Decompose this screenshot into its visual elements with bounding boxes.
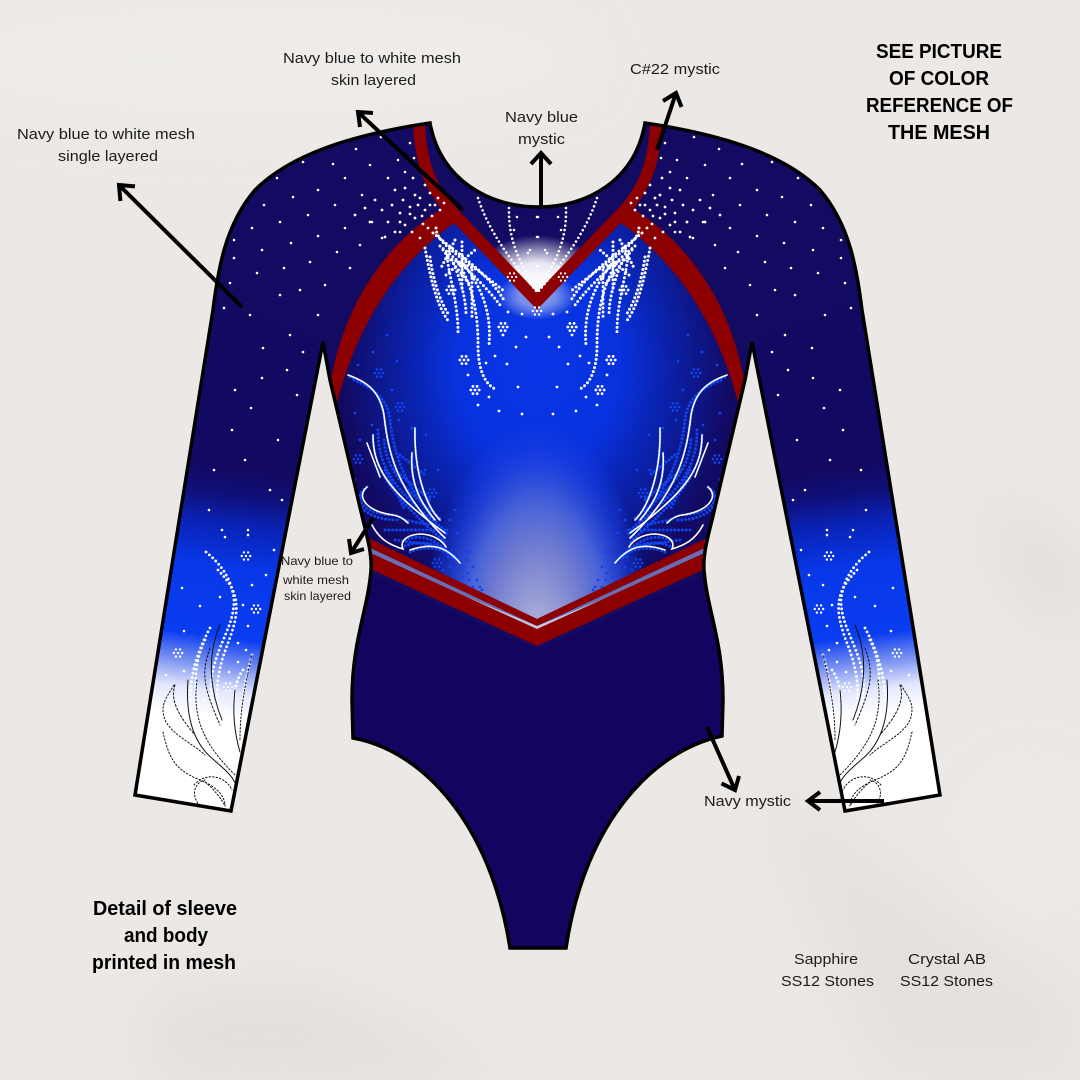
- label: skin layered mesh: skin layered: [331, 72, 416, 89]
- arrow: navy mystic from body: [707, 727, 739, 790]
- legend: sapphire stones: [781, 951, 874, 990]
- heading: detail of sleeve and body: printed in mesh: [92, 952, 236, 974]
- label: waist skin layered mesh: Navy blue to: [281, 554, 353, 568]
- red and silver waist chevrons: [366, 537, 709, 646]
- garment base fabric: [120, 110, 960, 960]
- neckline centre gem: [533, 307, 541, 315]
- heading: detail of sleeve and body: [92, 898, 237, 974]
- label: navy blue mystic: mystic: [518, 131, 566, 148]
- arrow: navy blue mystic: [531, 153, 551, 206]
- heading: see picture of color reference: REFERENCE OF: [866, 95, 1013, 117]
- arrow: C#22 mystic: [657, 93, 682, 150]
- leotard garment: [120, 110, 960, 960]
- label: navy mystic: Navy mystic: [704, 793, 792, 810]
- legend: crystal AB stones: SS12 Stones: [900, 973, 993, 990]
- arrow: waist skin layered: [349, 518, 373, 553]
- legend: sapphire stones: Sapphire: [794, 951, 858, 968]
- arrows: [119, 93, 884, 810]
- arrow: single layered mesh: [119, 185, 242, 307]
- right sleeve gradient: [783, 473, 938, 809]
- label: navy blue mystic: Navy blue: [505, 109, 578, 126]
- label: waist skin layered mesh: [281, 554, 353, 603]
- right rhinestone decoration: [538, 137, 912, 806]
- yoke glow: [494, 236, 580, 292]
- garment outline: [135, 123, 940, 948]
- heading: detail of sleeve and body: Detail of sleeve: [93, 898, 237, 920]
- label: skin layered mesh: [283, 50, 461, 89]
- heading: detail of sleeve and body: and body: [124, 925, 209, 947]
- label: skin layered mesh: Navy blue to white mesh: [283, 50, 461, 67]
- left sleeve gradient: [137, 473, 292, 809]
- heading: see picture of color reference: THE MESH: [888, 122, 990, 144]
- label: waist skin layered mesh: skin layered: [284, 589, 351, 603]
- torso gradient panel: [350, 223, 725, 619]
- lower body panel: [340, 560, 735, 950]
- label: navy blue mystic: [505, 109, 578, 148]
- heading: see picture of color reference: OF COLOR: [889, 68, 990, 90]
- label: waist skin layered mesh: white mesh: [282, 573, 349, 587]
- label: single layered mesh: single layered: [58, 148, 158, 165]
- legend: sapphire stones: SS12 Stones: [781, 973, 874, 990]
- arrow: skin layered mesh: [358, 112, 463, 210]
- legend: crystal AB stones: Crystal AB: [908, 951, 986, 968]
- red neckline V band: [419, 120, 656, 301]
- red raglan arcs: [331, 208, 744, 403]
- heading: see picture of color reference: [866, 41, 1013, 144]
- legend: crystal AB stones: [900, 951, 993, 990]
- label: single layered mesh: Navy blue to white mesh: [17, 126, 195, 143]
- left rhinestone decoration: [163, 137, 537, 806]
- label: C#22 mystic: C#22 mystic: [630, 61, 721, 78]
- label: single layered mesh: [17, 126, 195, 165]
- arrow: navy mystic from sleeve: [808, 792, 884, 810]
- heading: see picture of color reference: SEE PICTURE: [876, 41, 1002, 63]
